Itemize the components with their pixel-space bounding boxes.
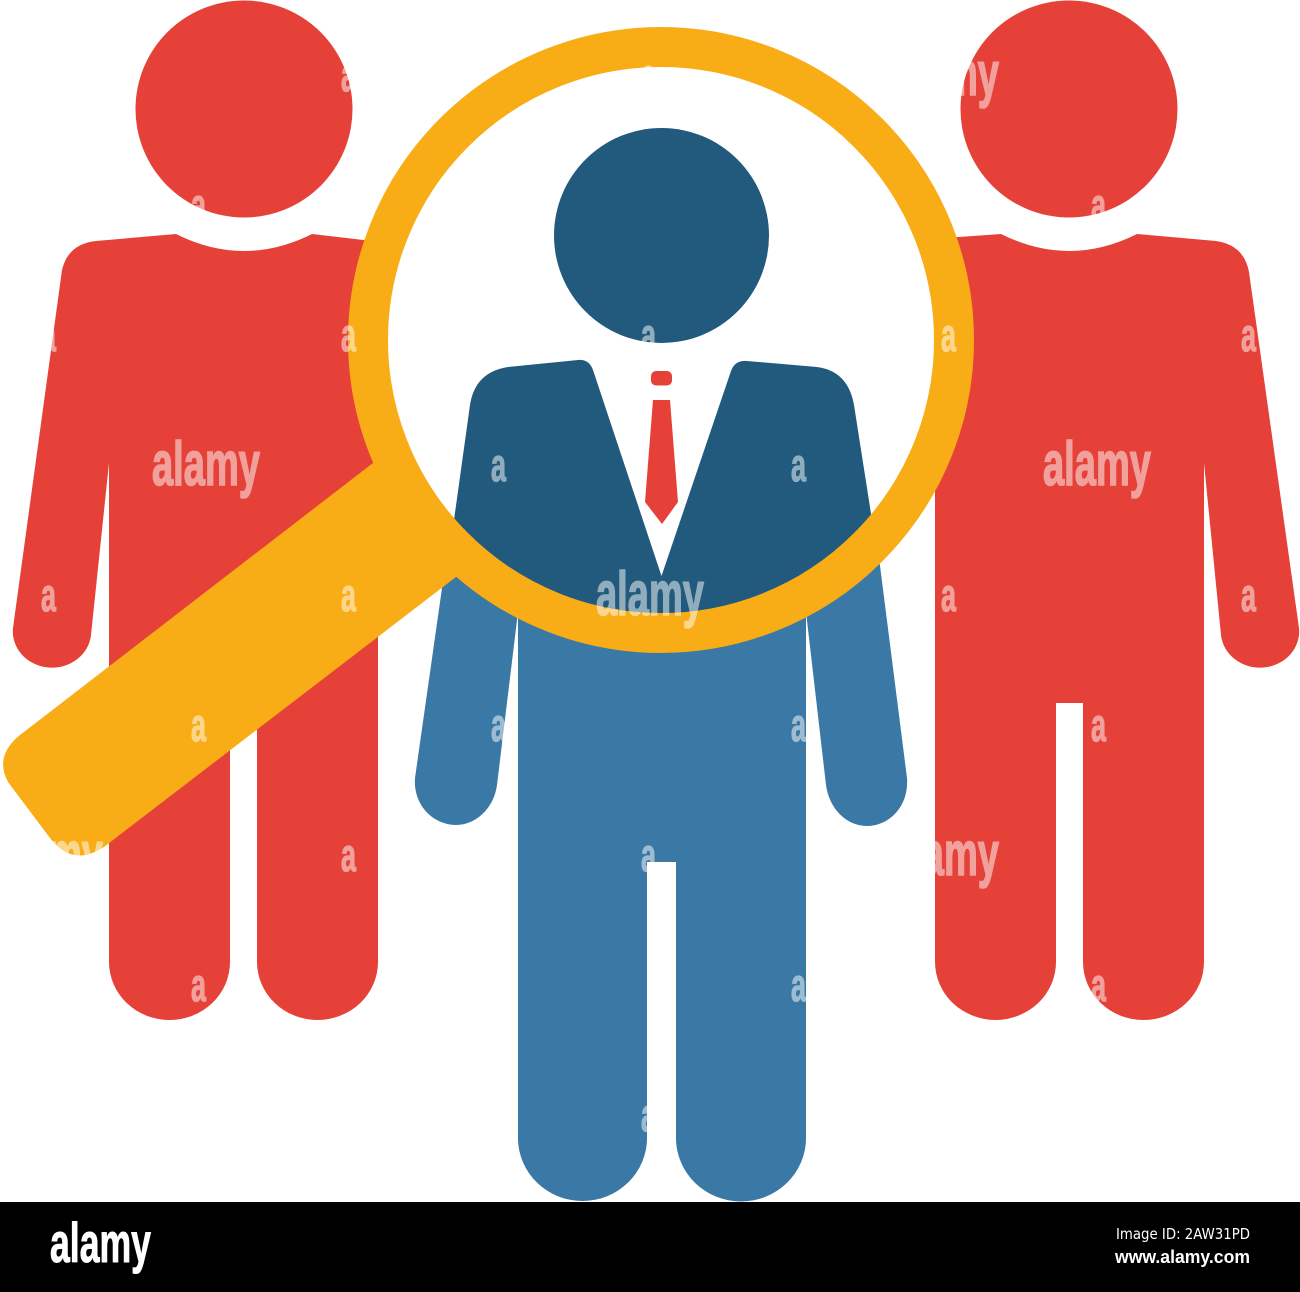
small watermarks: a (491, 699, 506, 751)
small watermarks: a (341, 49, 356, 101)
central blue person lower body (415, 550, 907, 1201)
small watermarks: a (791, 959, 806, 1011)
red tie (645, 371, 678, 524)
small watermarks: a (341, 829, 356, 881)
footer bar (0, 1202, 1300, 1292)
footer logo text: alamy (50, 1211, 151, 1274)
small watermarks: a (1091, 179, 1106, 231)
central person suit jacket (454, 360, 872, 630)
magnifier ring (368, 47, 954, 633)
small watermarks: a (1091, 959, 1106, 1011)
small watermarks: a (791, 699, 806, 751)
large watermarks: alamy (1043, 430, 1151, 499)
magnifier lens (368, 47, 954, 633)
image id: Image ID: 2AW31PD (1116, 1225, 1250, 1243)
small watermarks: a (1241, 569, 1256, 621)
small watermarks: a (791, 439, 806, 491)
small watermarks: a (191, 959, 206, 1011)
small watermarks: a (941, 569, 956, 621)
large watermarks: alamy (891, 40, 999, 109)
small watermarks: a (641, 1089, 656, 1141)
small watermarks: a (641, 829, 656, 881)
right red person (935, 0, 1299, 1020)
small watermarks: a (341, 569, 356, 621)
small watermarks: a (641, 309, 656, 361)
large watermarks: alamy (596, 560, 704, 629)
footer url: www.alamy.com (1114, 1247, 1250, 1267)
small watermarks: a (41, 569, 56, 621)
central person head (554, 128, 769, 343)
large watermarks: alamy (891, 820, 999, 889)
large watermarks: alamy (152, 430, 260, 499)
magnifier handle (3, 463, 480, 856)
small watermarks: a (1091, 699, 1106, 751)
small watermarks: a (641, 49, 656, 101)
small watermarks: a (1241, 309, 1256, 361)
small watermarks: a (191, 699, 206, 751)
small watermarks (41, 49, 1256, 1141)
small watermarks: a (191, 179, 206, 231)
small watermarks: a (41, 309, 56, 361)
large watermarks (0, 40, 1151, 889)
small watermarks: a (491, 439, 506, 491)
small watermarks: a (341, 309, 356, 361)
small watermarks: a (941, 309, 956, 361)
large watermarks: alamy (0, 820, 103, 889)
left red person (13, 0, 378, 1020)
